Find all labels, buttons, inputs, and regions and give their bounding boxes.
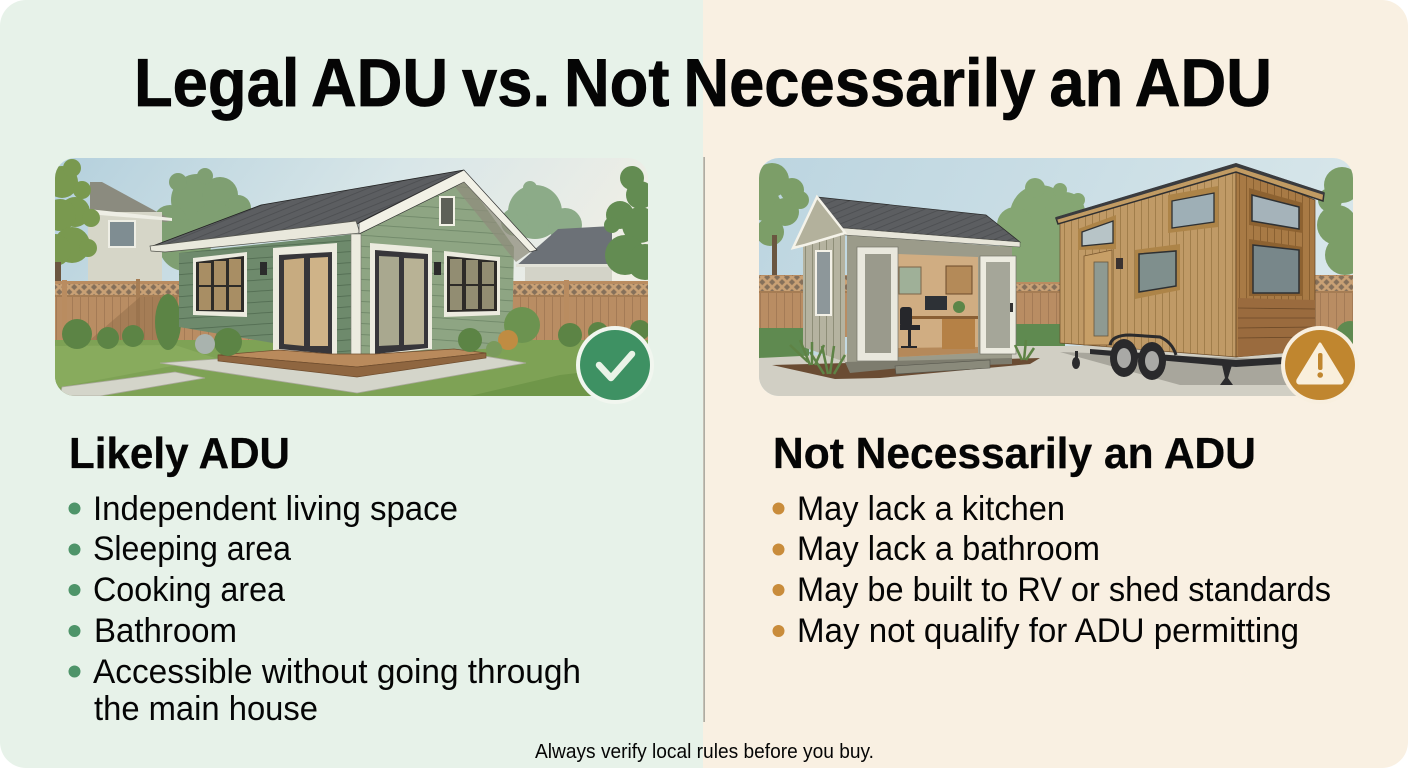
loft window large xyxy=(1168,186,1218,233)
fence xyxy=(759,275,1353,337)
chair xyxy=(900,307,920,348)
base xyxy=(845,358,1012,373)
illustration: backyard cottage xyxy=(39,158,663,396)
left wall xyxy=(179,234,355,357)
footer note: Always verify local rules before you buy. xyxy=(535,741,874,763)
list: likely ADU: Cooking area xyxy=(93,571,285,609)
list: not necessarily an ADU: May lack a bathroom xyxy=(797,530,1100,568)
tiny house xyxy=(1056,163,1324,385)
list: not necessarily an ADU: May be built to RV or shed standards xyxy=(797,571,1331,609)
background trees left xyxy=(153,168,251,271)
driveway xyxy=(759,346,1353,396)
background tree right xyxy=(501,181,582,242)
deck xyxy=(218,349,486,377)
list: likely ADU: Bathroom xyxy=(94,612,237,650)
front window xyxy=(1135,244,1180,299)
lantern xyxy=(1116,258,1123,269)
wall art xyxy=(899,267,921,294)
corner post xyxy=(351,234,361,357)
roof xyxy=(150,170,464,247)
center divider xyxy=(704,157,705,722)
lower side cladding xyxy=(1238,298,1315,357)
side upper window xyxy=(1249,188,1303,233)
steps xyxy=(895,360,990,374)
foreground tree right xyxy=(604,166,648,280)
wheels xyxy=(1110,339,1166,380)
list: not necessarily an ADU xyxy=(772,490,1331,650)
side window xyxy=(816,251,831,315)
patio and walk xyxy=(61,356,526,396)
list: likely ADU: Independent living space xyxy=(93,490,458,528)
lawn xyxy=(55,340,648,396)
trailer frame xyxy=(1090,349,1315,367)
desk xyxy=(905,316,978,349)
left window xyxy=(193,252,247,317)
right window xyxy=(444,251,500,317)
corkboard xyxy=(946,266,972,294)
list: not necessarily an ADU: May not qualify for ADU permitting xyxy=(797,612,1299,650)
interior xyxy=(898,254,978,357)
bushes back xyxy=(62,294,650,350)
tree middle xyxy=(997,178,1085,268)
side lower window xyxy=(1249,239,1303,296)
entry door xyxy=(1084,250,1112,345)
wall lamp right xyxy=(434,262,441,275)
title: Legal ADU vs. Not Necessarily an ADU xyxy=(134,45,1272,121)
hedges xyxy=(759,321,1353,358)
plant xyxy=(953,301,965,313)
foreground tree left xyxy=(55,159,100,281)
front wall xyxy=(847,235,1012,363)
list: likely ADU: Sleeping area xyxy=(93,530,291,568)
fence xyxy=(55,279,648,342)
roof xyxy=(1056,164,1324,224)
mulch bed xyxy=(772,358,1040,379)
foundation bushes xyxy=(195,307,540,357)
right french door xyxy=(370,243,432,355)
front wall xyxy=(1060,168,1236,357)
cottage xyxy=(150,170,537,377)
gable trim xyxy=(359,170,537,252)
list: likely ADU xyxy=(68,490,581,728)
list: likely ADU: the main house xyxy=(94,690,318,728)
roof trim xyxy=(843,228,1020,247)
list: not necessarily an ADU: May lack a kitchen xyxy=(797,490,1065,528)
eave trim xyxy=(150,221,360,252)
neighbor house right xyxy=(516,226,612,285)
shed xyxy=(793,197,1020,374)
icon: check badge xyxy=(576,326,654,404)
trailer shadow xyxy=(1060,352,1310,385)
wall lamp left xyxy=(260,262,267,275)
roof xyxy=(817,197,1020,242)
left french door xyxy=(273,243,337,355)
gable xyxy=(793,197,845,248)
side wall xyxy=(1236,168,1315,357)
neighbor house left xyxy=(88,182,172,287)
illustration: shed and tiny house xyxy=(749,158,1365,396)
gable soffit xyxy=(455,182,530,262)
panel: likely ADU xyxy=(39,158,663,728)
tree left xyxy=(759,163,809,275)
tongue jack xyxy=(1072,351,1233,385)
right open door xyxy=(980,256,1016,354)
heading: likely ADU: Likely ADU xyxy=(69,429,290,478)
gable wall xyxy=(359,177,514,357)
monitor xyxy=(925,296,947,310)
left open door xyxy=(857,247,898,361)
panel: not necessarily an ADU xyxy=(749,158,1365,650)
wheel fender xyxy=(1110,335,1176,355)
tree right xyxy=(1317,167,1353,275)
loft window small xyxy=(1078,215,1116,250)
list: likely ADU: Accessible without going through xyxy=(93,653,581,691)
icon: warning badge xyxy=(1281,326,1359,404)
shed plants xyxy=(790,340,1034,374)
vent xyxy=(440,197,454,225)
side wall xyxy=(803,232,845,362)
shadow on fence xyxy=(90,297,178,340)
heading: not necessarily an ADU: Not Necessarily an ADU xyxy=(773,429,1256,478)
